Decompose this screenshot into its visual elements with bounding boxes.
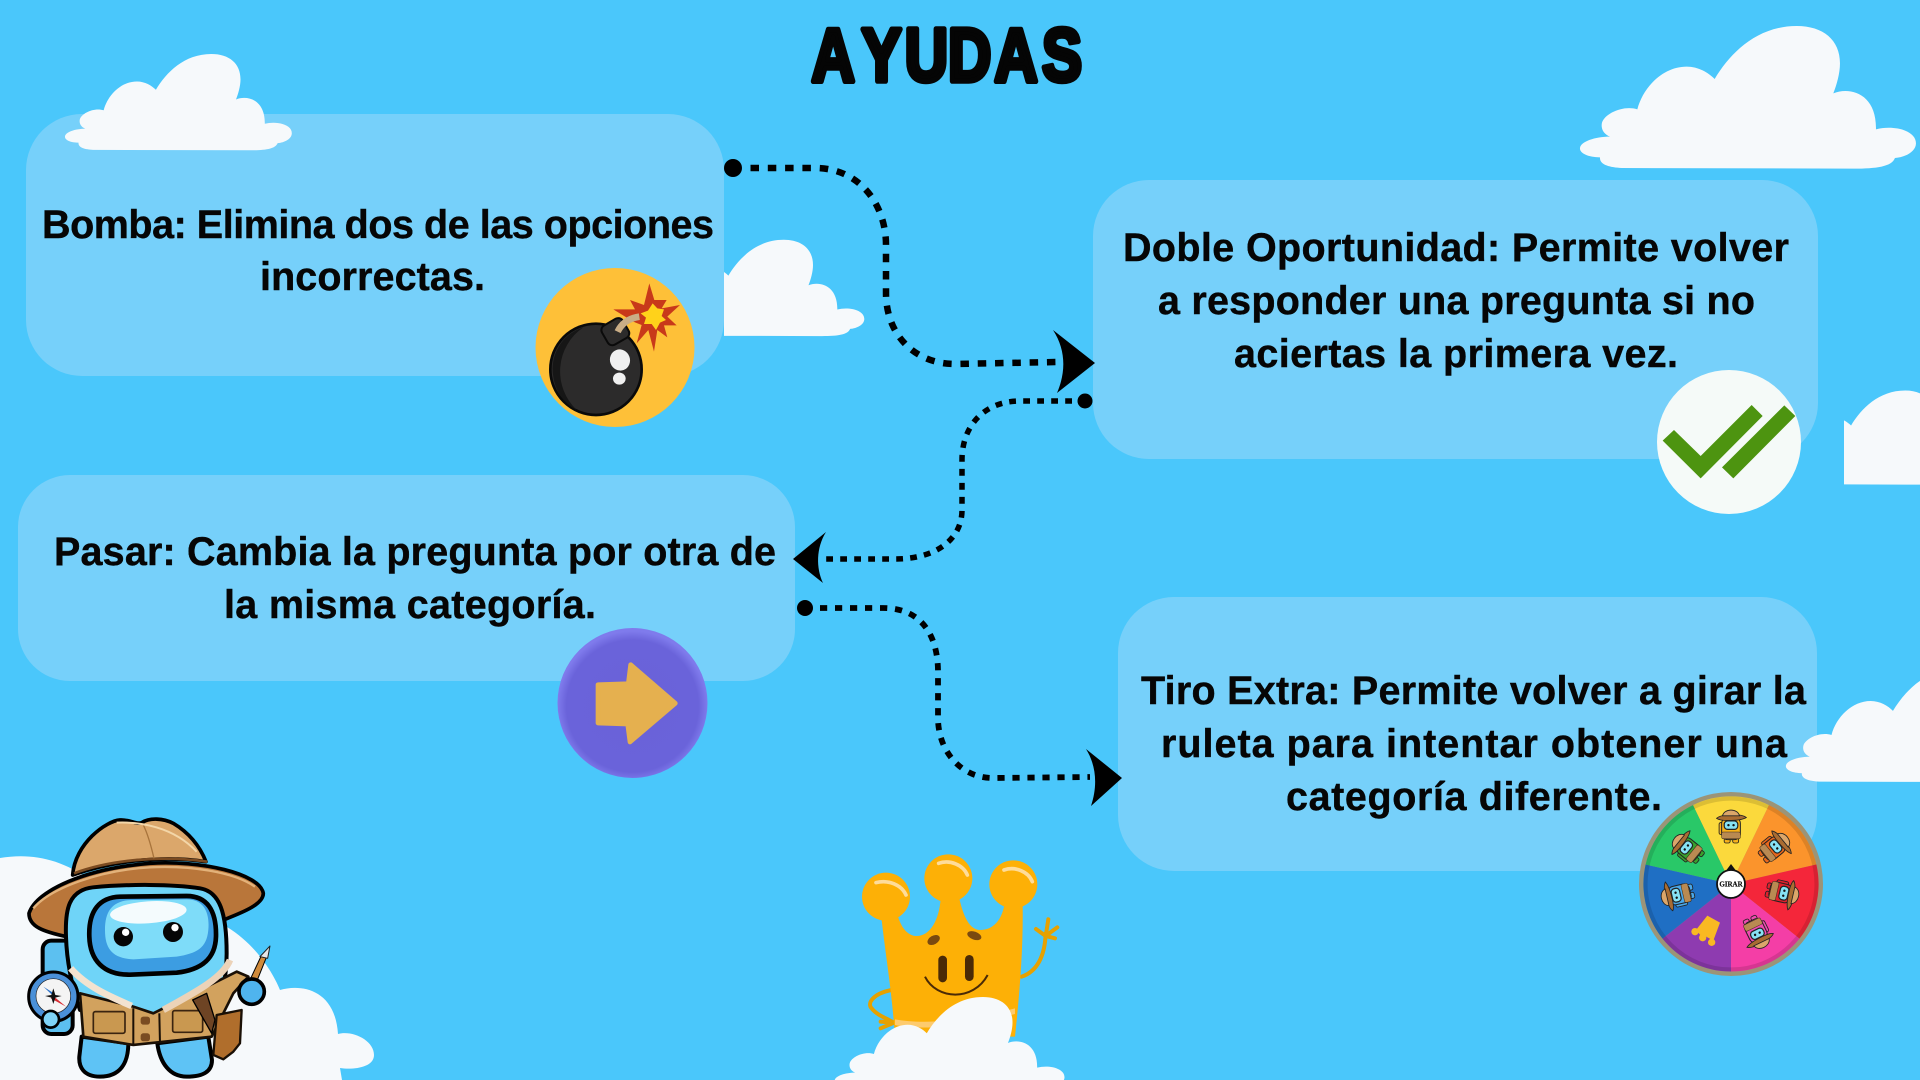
panel background: Pasar <box>18 475 795 681</box>
cloud: over crown <box>835 997 1065 1080</box>
crown highlights <box>876 862 1032 895</box>
text: Tiro Extra: categoría diferente. <box>1286 775 1662 819</box>
icon: double check <box>1657 370 1801 514</box>
panel background: Bomba <box>26 114 724 376</box>
explorer pencil and hand <box>239 946 270 1004</box>
explorer visor <box>89 896 216 975</box>
explorer jacket <box>71 960 248 1059</box>
text: Bomba: incorrectas. <box>260 255 485 299</box>
cloud: top left over Bomba panel <box>65 54 292 150</box>
crown arms <box>870 919 1057 1028</box>
text: Doble Oportunidad: a responder una pregunta si no <box>1158 279 1755 323</box>
explorer hat brim <box>29 863 263 937</box>
panel: Bomba <box>26 114 724 376</box>
text: Tiro Extra: Tiro Extra: Permite volver a girar la <box>1141 669 1807 713</box>
panel: Tiro Extra <box>1118 597 1817 871</box>
title: AYUDAS <box>812 15 1082 98</box>
explorer legs <box>79 1037 212 1077</box>
cloud: top right <box>1580 26 1916 169</box>
explorer hat crown <box>73 819 207 875</box>
icon: next arrow button <box>558 628 708 778</box>
icon: category wheel <box>1639 792 1823 976</box>
text: Doble Oportunidad: Doble Oportunidad: Permite volver <box>1123 226 1789 270</box>
cloud: lower right <box>1786 669 1920 782</box>
arrow: Pasar to Tiro Extra <box>797 600 1122 806</box>
crown belt <box>895 1008 1015 1028</box>
text: Tiro Extra: ruleta para intentar obtener una <box>1161 722 1788 766</box>
crown balls <box>862 854 1037 921</box>
wheel spin button: GIRAR <box>1719 880 1744 888</box>
text: Doble Oportunidad: aciertas la primera vez. <box>1234 332 1678 376</box>
character: explorer <box>29 819 270 1077</box>
panel: Doble Oportunidad <box>1093 180 1818 459</box>
explorer compass <box>29 972 78 1028</box>
crown body <box>882 898 1023 1037</box>
panel background: Doble Oportunidad <box>1093 180 1818 459</box>
arrow: Doble Oportunidad to Pasar <box>793 394 1092 583</box>
cloud: behind explorer <box>0 856 374 1080</box>
character: crown mascot <box>862 854 1057 1037</box>
explorer backpack <box>43 941 73 1034</box>
cloud: behind bomb panel <box>724 240 864 336</box>
wheel characters <box>1658 810 1802 954</box>
icon: bomb <box>536 268 694 427</box>
text: Bomba: Bomba: Elimina dos de las opciones <box>42 203 714 247</box>
text: Pasar: Pasar: Cambia la pregunta por otra de <box>54 530 776 574</box>
explorer body <box>66 885 227 1020</box>
wheel wedges <box>1643 796 1819 972</box>
cloud: right edge <box>1844 390 1920 485</box>
arrow: Bomba to Doble Oportunidad <box>724 159 1095 393</box>
panel: Pasar <box>18 475 795 681</box>
wheel spin button <box>1717 864 1745 898</box>
panel background: Tiro Extra <box>1118 597 1817 871</box>
crown face <box>925 929 988 995</box>
text: Pasar: la misma categoría. <box>224 583 596 627</box>
